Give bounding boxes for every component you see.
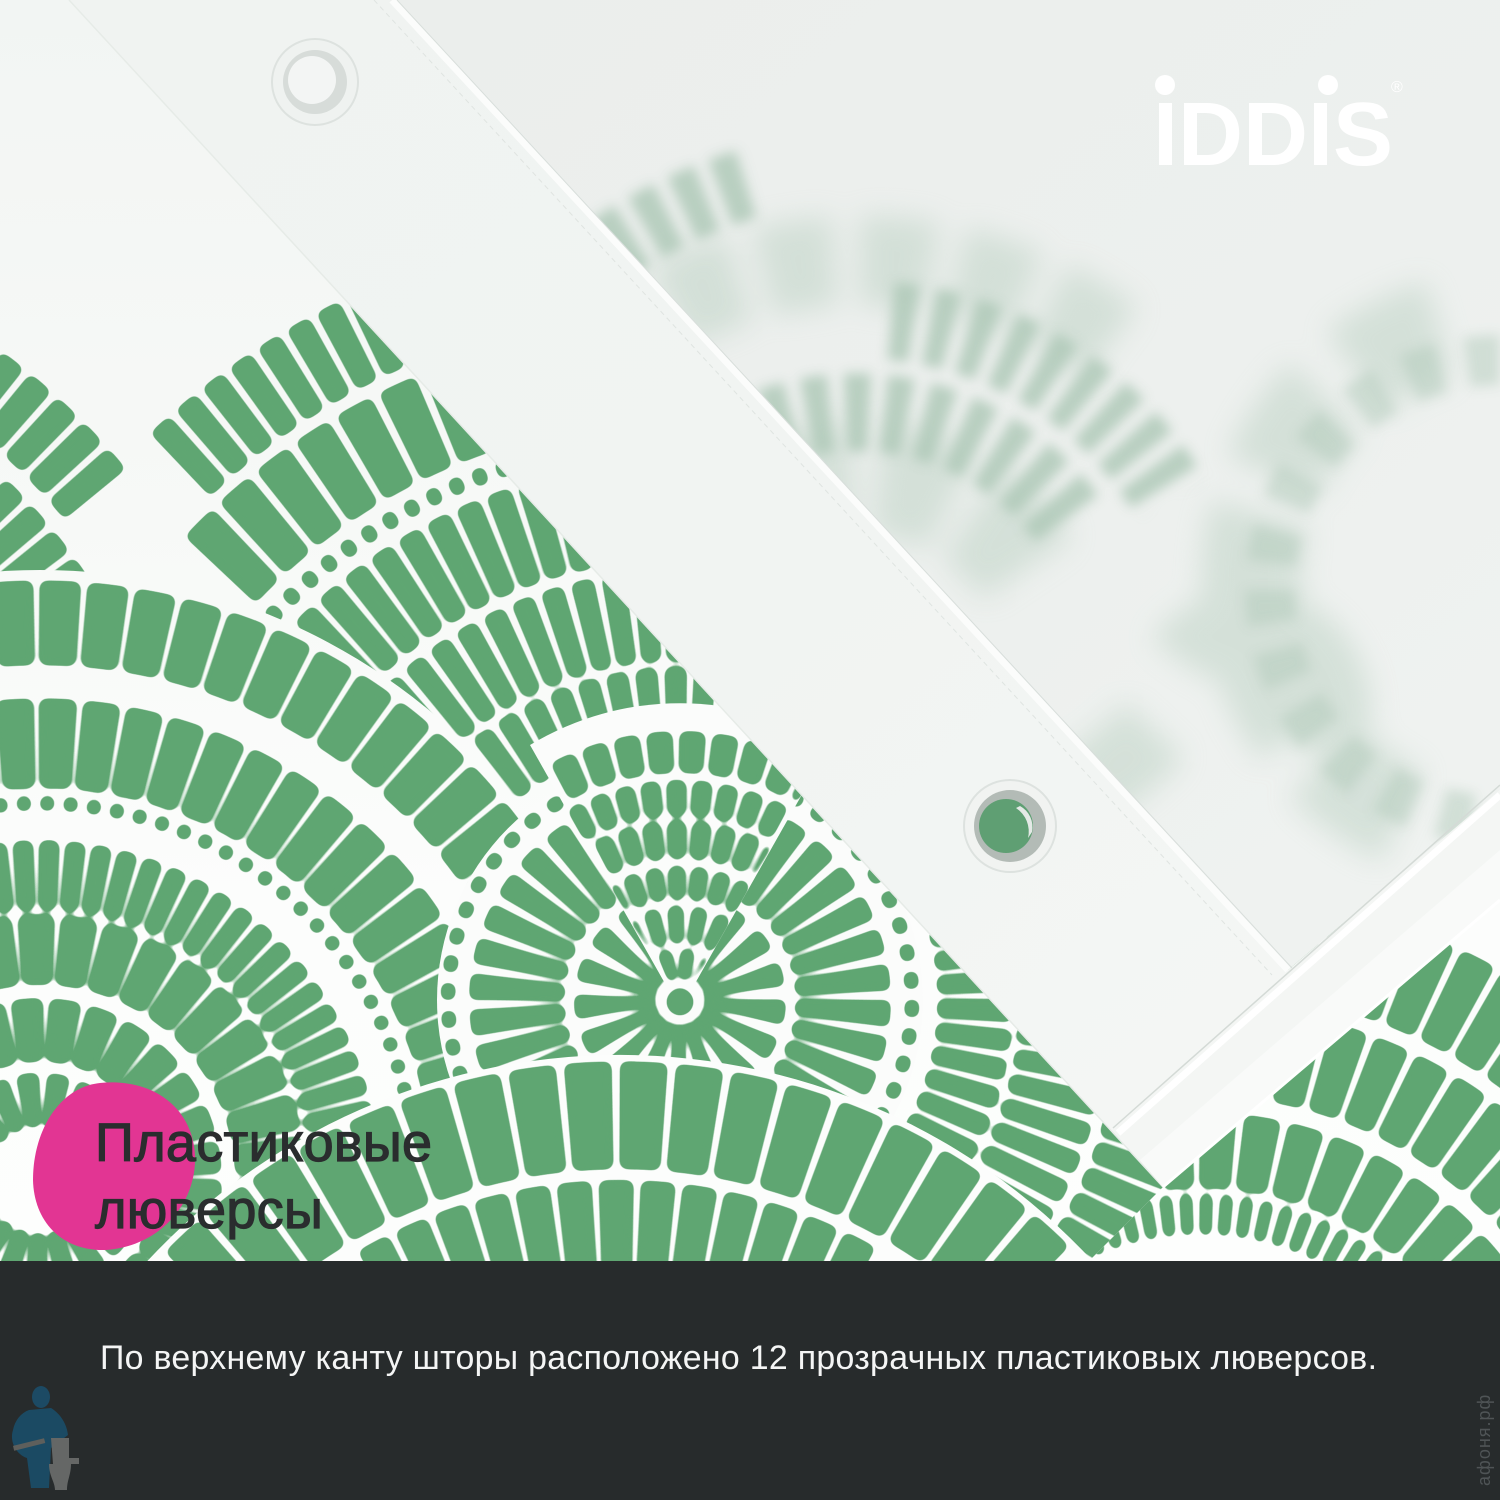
panel: description bar [0,1261,1500,1500]
pattern: bottom centre fan [122,1055,1118,1290]
see-through pattern shadows [590,180,1500,833]
pink accent blob [33,1082,195,1250]
heading: люверсы [95,1180,323,1240]
logo: IDDIS: ® [1391,79,1403,96]
description text: По верхнему канту шторы расположено 12 прозрачных пластиковых люверсов. [100,1339,1377,1377]
pattern: left lower fan [0,570,650,1485]
pattern: spike fan wings [437,757,923,1243]
watermark: афоня.рф [1474,1394,1494,1486]
heading: Пластиковые [95,1113,432,1173]
icon: plumber with toilet [12,1386,79,1490]
heading [94,1113,432,1240]
pattern: bottom right fan [681,940,1500,1290]
pattern: left top fan [0,260,100,607]
sheer upper curtain layer [548,139,1500,970]
icon: lower grommet [964,780,1056,872]
pattern: spike fan centre wedge [530,703,802,1016]
pattern: large fan outer rows [152,303,1163,1258]
logo: IDDIS: IDDIS [1153,85,1393,185]
icon: top grommet [272,39,358,125]
curtain top hem band [69,0,1500,1187]
